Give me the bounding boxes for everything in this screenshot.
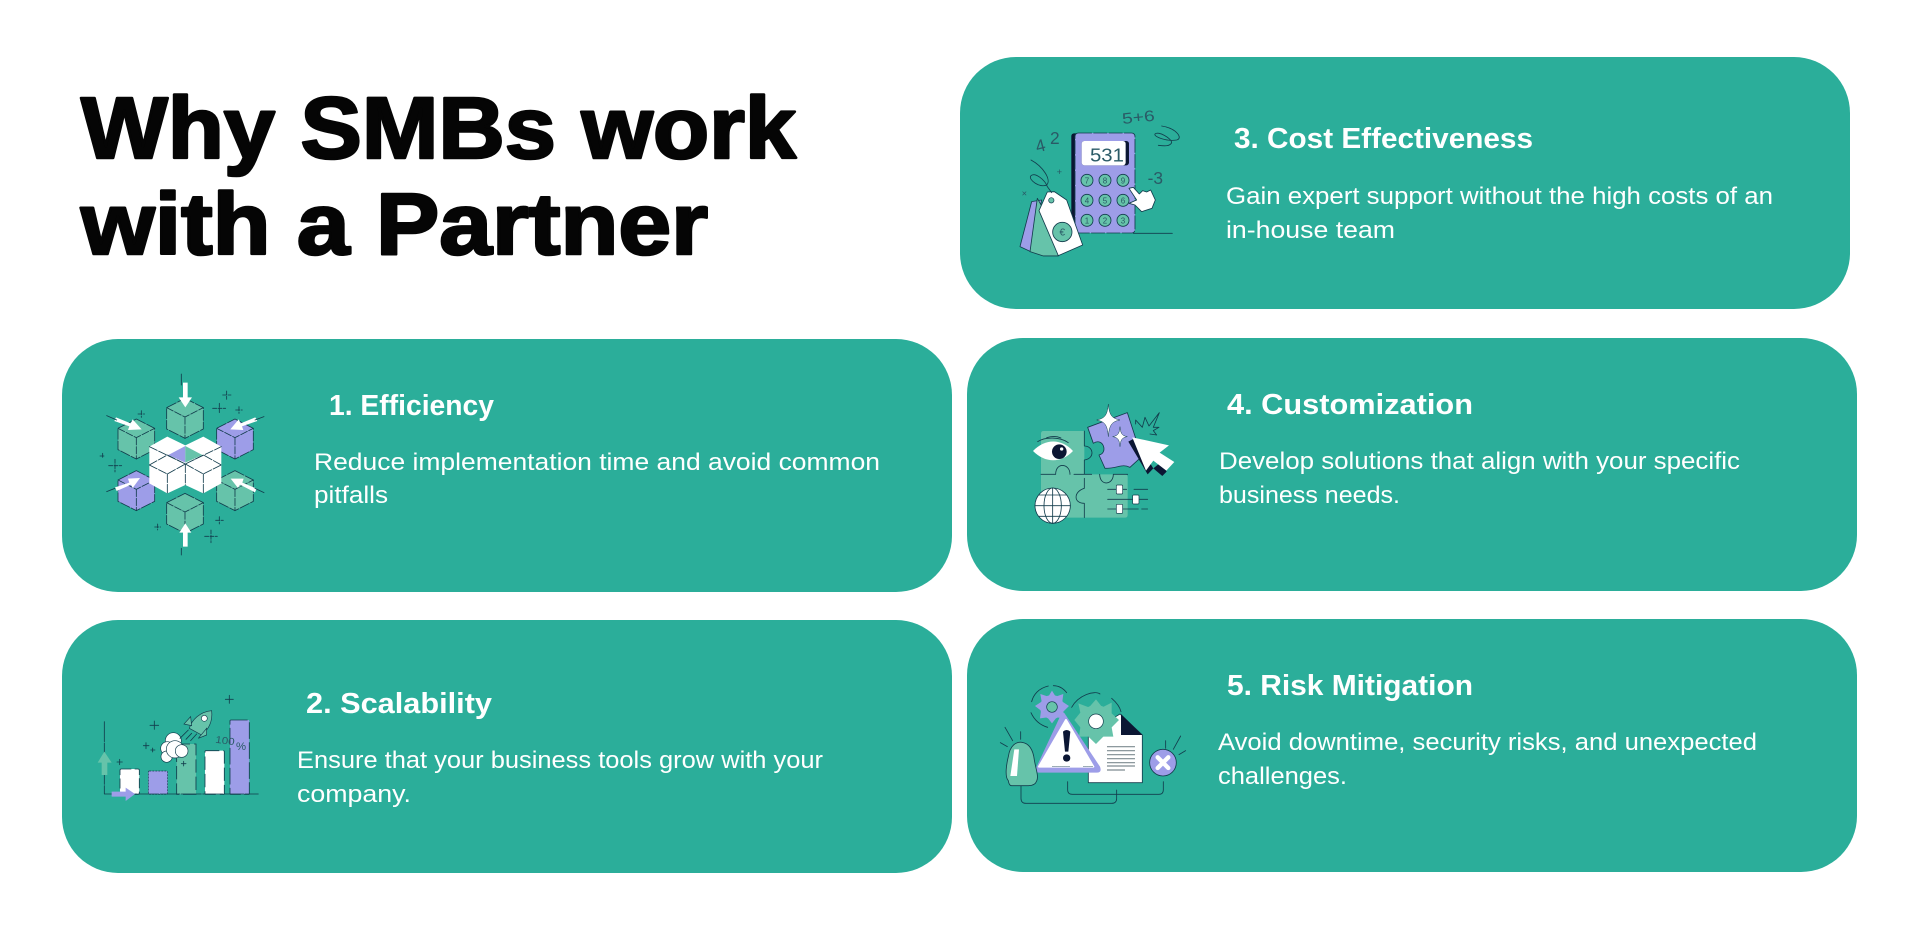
text: 3 description: Gain expert support without the high costs of an (1226, 183, 1773, 210)
icon: calculator and price tags: 7 (1085, 176, 1090, 185)
title (80, 80, 797, 273)
icon: puzzle with eye, globe and cursor (1033, 404, 1174, 523)
icon: growth bar chart with rocket: % (236, 741, 246, 753)
icon: calculator and price tags: 2 (1050, 128, 1060, 148)
text: 1 description: pitfalls (314, 482, 388, 509)
heading: 1: 1. Efficiency (329, 390, 494, 422)
text: 5 description: Avoid downtime, security risks, and unexpected (1218, 729, 1757, 756)
icon: calculator and price tags: 5 (1103, 196, 1108, 205)
icon: assembling cubes (100, 374, 264, 555)
text: 5 description (1218, 729, 1757, 790)
panel: 5. Risk Mitigation (967, 619, 1857, 872)
title: Why SMBs work (81, 80, 797, 177)
icon: calculator and price tags: 9 (1121, 176, 1126, 185)
icon: calculator and price tags: 6 (1121, 196, 1126, 205)
icon: calculator and price tags: -3 (1148, 168, 1163, 188)
icon: calculator and price tags: 4 (1033, 135, 1048, 157)
panel: 2. Scalability (62, 620, 952, 873)
text: 5 description: challenges. (1218, 763, 1347, 790)
text: 2 description: Ensure that your business tools grow with your (297, 747, 823, 774)
icon: calculator and price tags: 2 (1103, 216, 1108, 225)
text: 2 description: company. (297, 781, 411, 808)
text: 4 description: business needs. (1219, 482, 1400, 509)
icon: calculator and price tags: 531 (1090, 144, 1124, 165)
panel: 3. Cost Effectiveness (960, 57, 1850, 309)
icon: calculator and price tags: × (1022, 189, 1027, 199)
title: with a Partner (80, 176, 708, 273)
icon: warning sign, gears, document and alarm (1000, 686, 1186, 803)
text: 4 description (1219, 448, 1740, 509)
text: 1 description (314, 449, 880, 509)
panel: 1. Efficiency (62, 339, 952, 592)
text: 2 description (297, 747, 823, 808)
icon: calculator and price tags: 5+6 (1121, 108, 1156, 128)
icon: calculator and price tags: + (1057, 167, 1062, 177)
icon: calculator and price tags: 4 (1085, 196, 1090, 205)
text: 1 description: Reduce implementation time and avoid common (314, 449, 880, 476)
icon: calculator and price tags: 1 (1085, 216, 1090, 225)
icon: calculator and price tags: 8 (1103, 176, 1108, 185)
icon: growth bar chart with rocket: 100 (215, 735, 236, 748)
text: 3 description: in-house team (1226, 217, 1395, 244)
icon: calculator and price tags (1020, 108, 1179, 256)
heading: 3: 3. Cost Effectiveness (1234, 123, 1533, 155)
heading: 2: 2. Scalability (306, 688, 492, 720)
heading: 4: 4. Customization (1227, 389, 1473, 421)
heading: 5: 5. Risk Mitigation (1227, 670, 1473, 702)
text: 4 description: Develop solutions that align with your specific (1219, 448, 1740, 475)
icon: calculator and price tags: € (1060, 228, 1066, 239)
panel: 4. Customization (967, 338, 1857, 591)
text: 3 description (1226, 183, 1773, 244)
icon: calculator and price tags: 3 (1121, 216, 1126, 225)
icon: growth bar chart with rocket (98, 695, 258, 801)
